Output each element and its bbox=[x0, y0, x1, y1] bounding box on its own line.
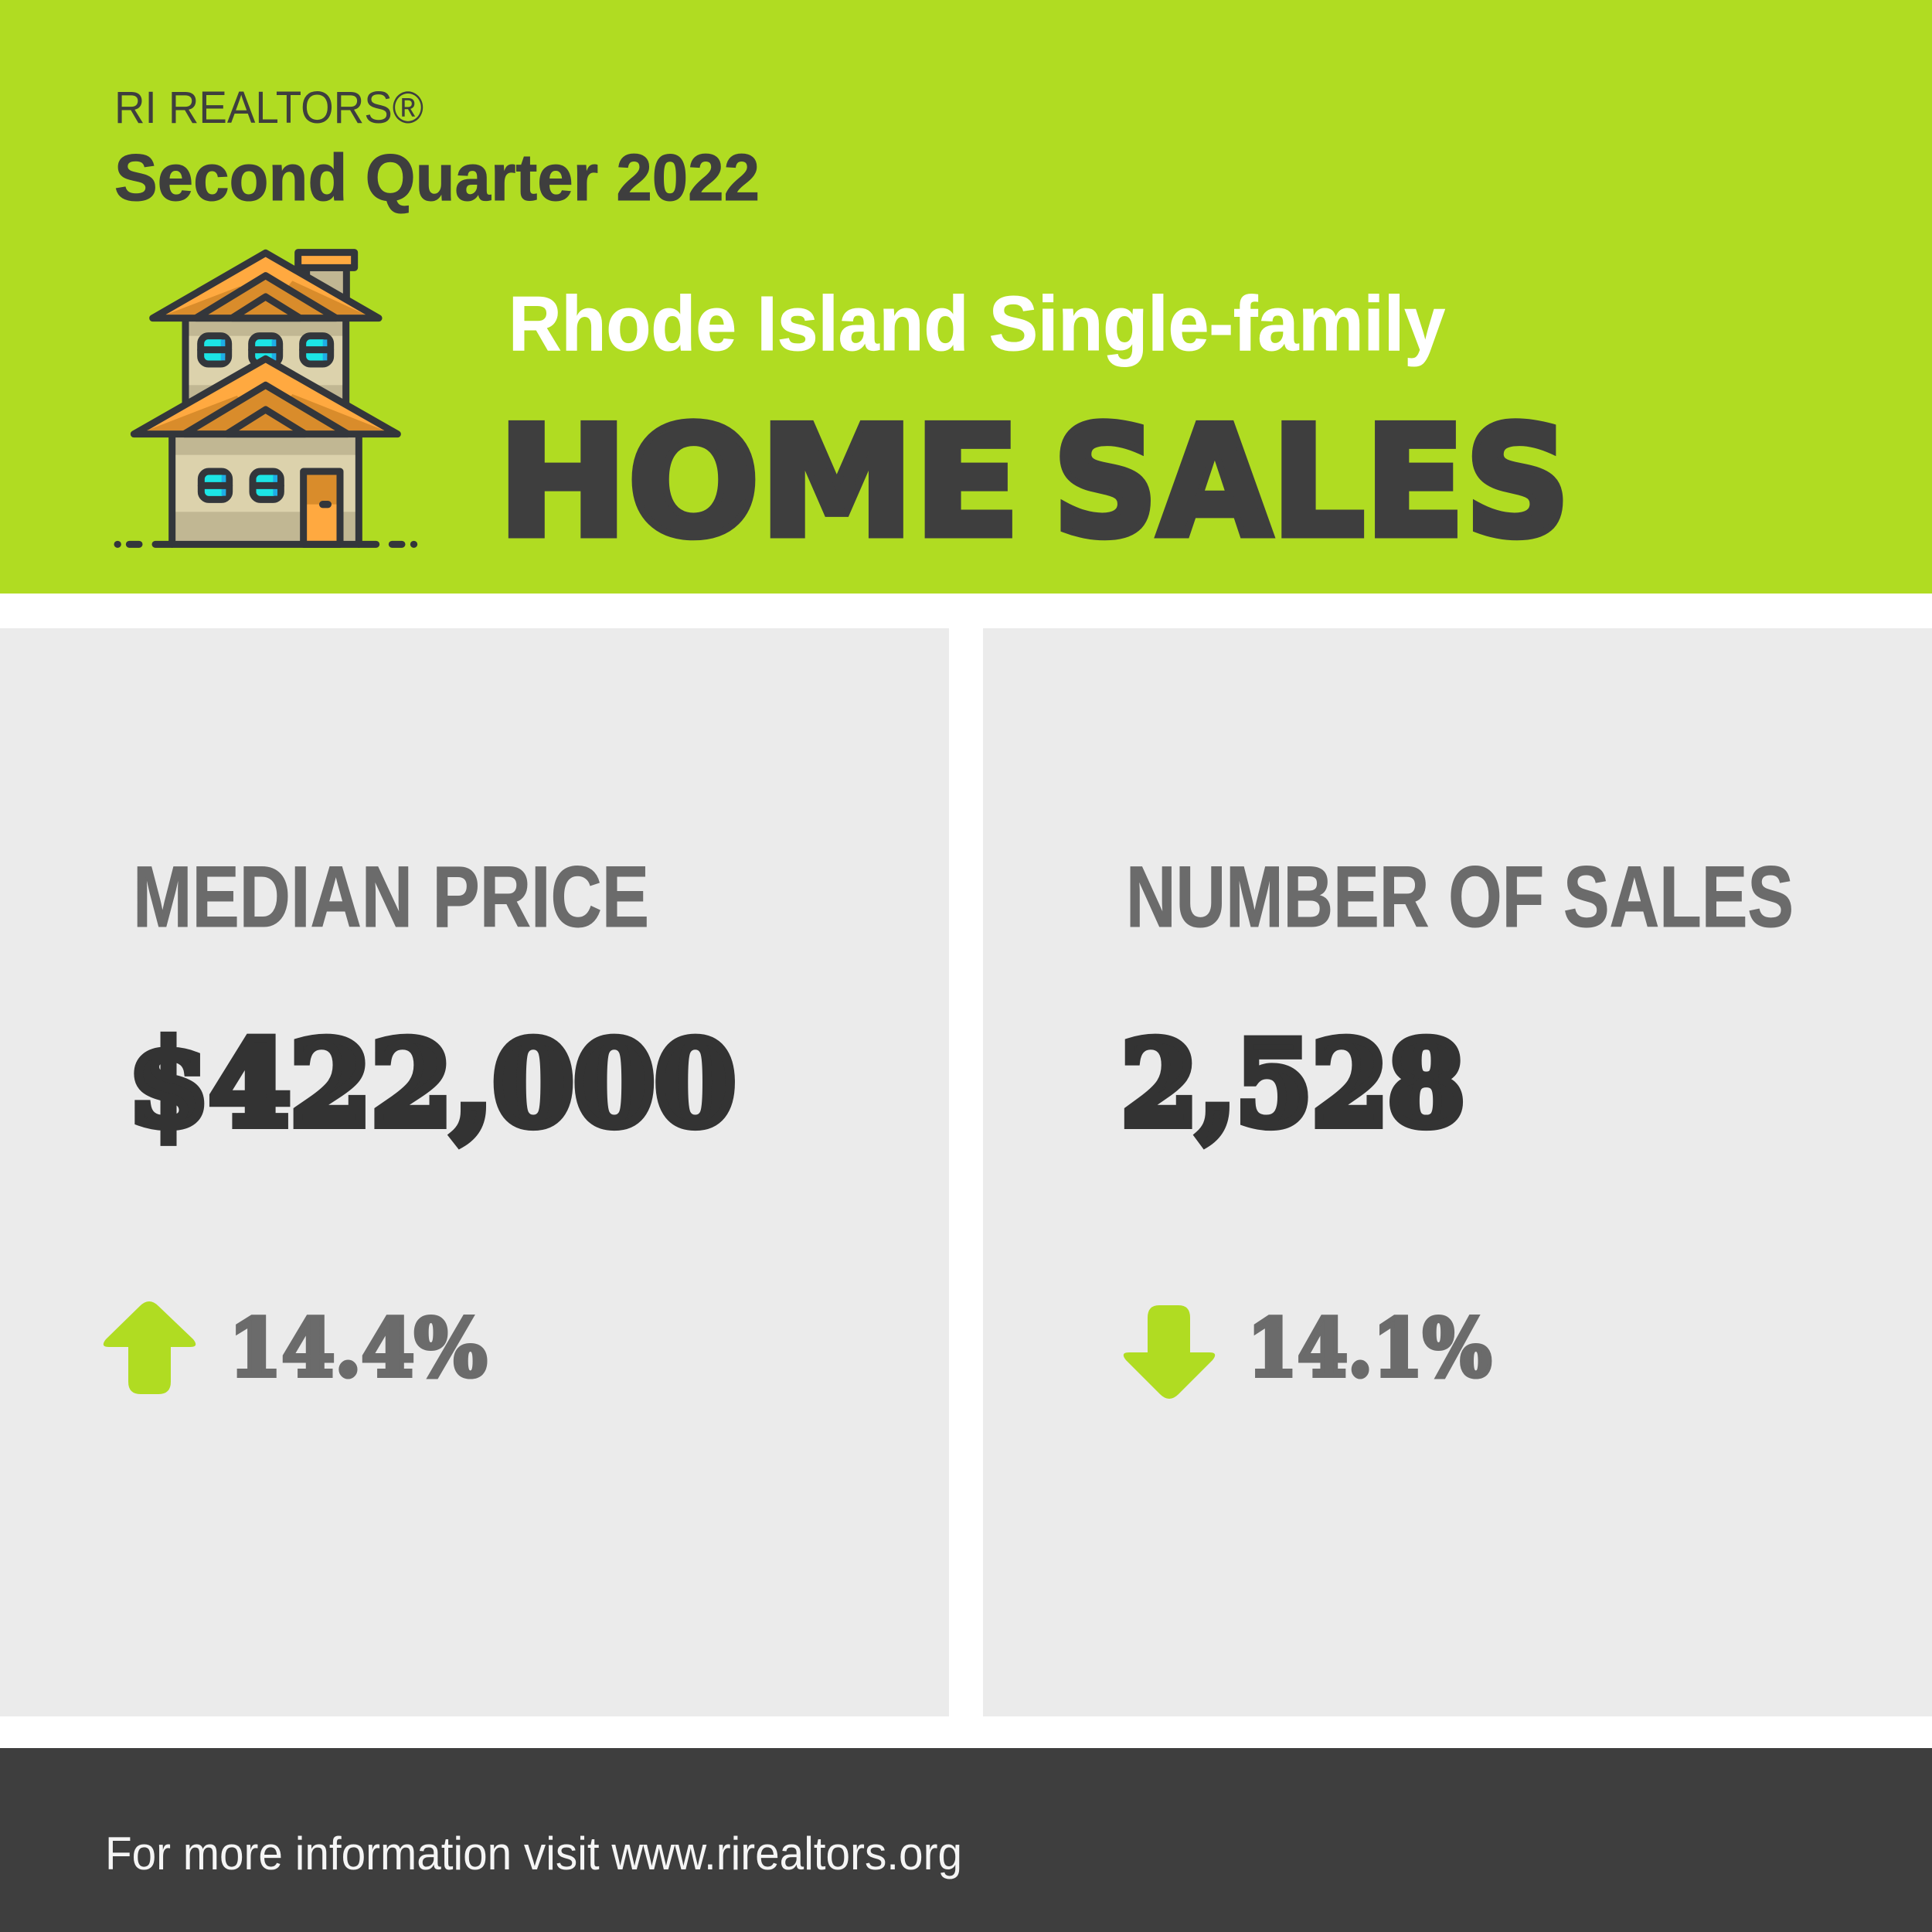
panel: median price bbox=[0, 628, 949, 1716]
icon: house bbox=[117, 253, 414, 544]
panel: number of sales bbox=[983, 628, 1932, 1716]
footer band bbox=[0, 1748, 1932, 1932]
lower roof bbox=[134, 359, 397, 434]
subtitle: Rhode Island Single-family bbox=[509, 281, 1445, 367]
ground line bbox=[117, 534, 414, 555]
icon: up arrow bbox=[104, 1301, 196, 1394]
number of sales change: 14.1% bbox=[1247, 1302, 1492, 1395]
main title: HOME bbox=[498, 394, 1020, 571]
lower windows bbox=[201, 471, 281, 499]
upper windows bbox=[201, 336, 331, 364]
footer text: For more information visit www.rirealtors.org bbox=[105, 1828, 962, 1879]
period heading: Second Quarter 2022 bbox=[114, 141, 760, 215]
upper roof bbox=[153, 253, 379, 318]
main title bbox=[498, 394, 1570, 571]
median price change: 14.4% bbox=[229, 1302, 487, 1395]
median price value: $422,000 bbox=[128, 1016, 736, 1152]
icon: down arrow bbox=[1124, 1305, 1215, 1399]
chimney bbox=[298, 253, 355, 301]
upper storey bbox=[185, 318, 346, 406]
organisation label: RI REALTORS® bbox=[114, 83, 423, 133]
main title: SALES bbox=[1053, 394, 1570, 571]
lower storey bbox=[172, 434, 359, 544]
door bbox=[304, 471, 340, 544]
number of sales value: 2,528 bbox=[1121, 1016, 1464, 1152]
header band bbox=[0, 0, 1932, 594]
median price heading: MEDIAN PRICE bbox=[133, 849, 649, 945]
